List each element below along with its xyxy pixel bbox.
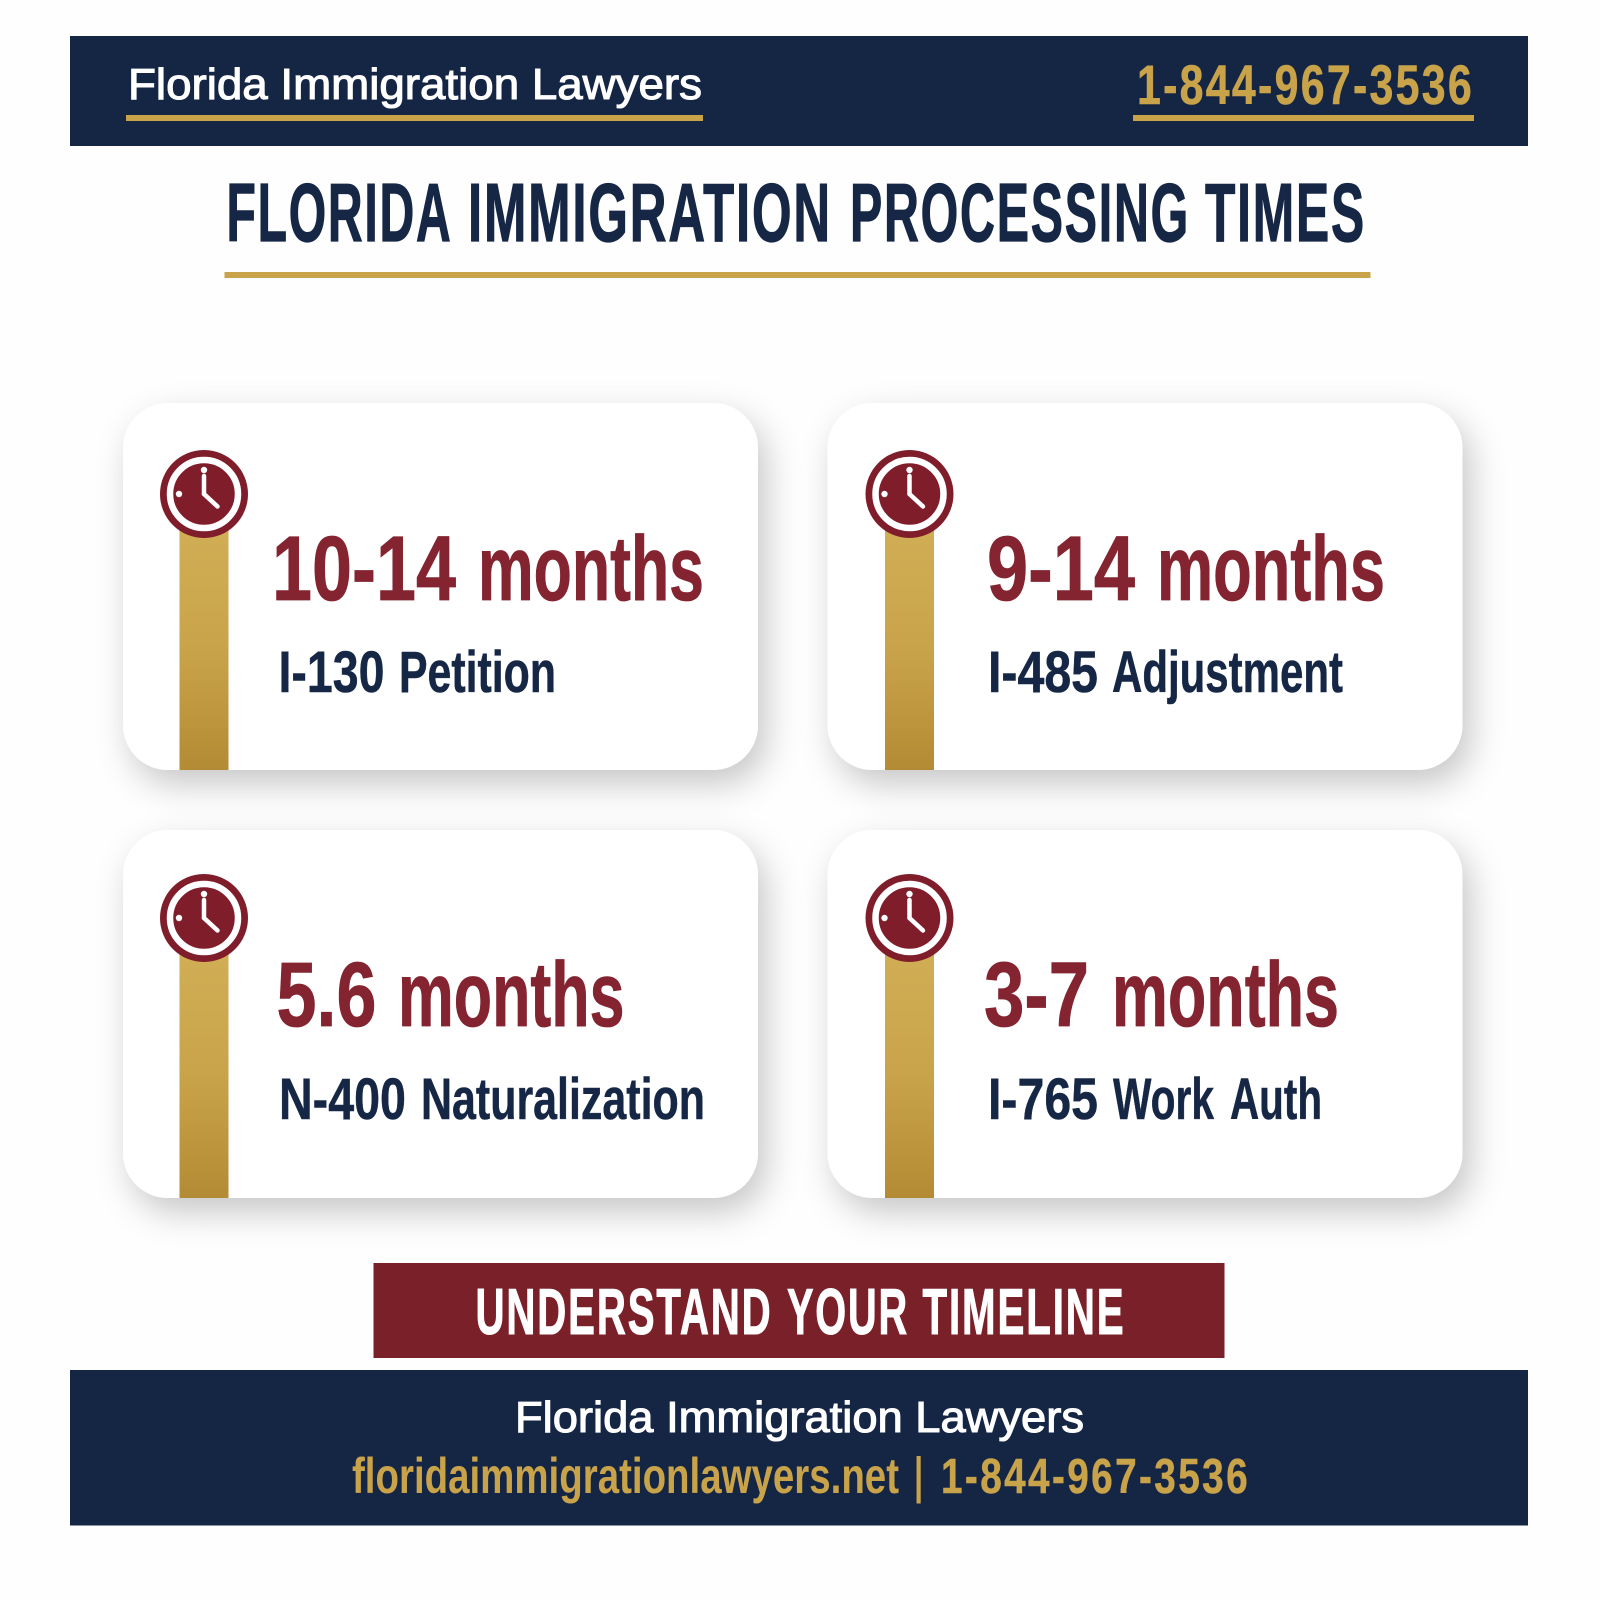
panel: N-400 Naturalization (123, 830, 758, 1198)
title: TIMES (1205, 166, 1366, 259)
form name (988, 640, 1343, 705)
panel: I-130 Petition (123, 403, 758, 770)
processing time: 9-14 (987, 518, 1135, 620)
title (224, 166, 1370, 278)
processing time: 5.6 (276, 944, 376, 1046)
form name: I-765 (988, 1067, 1098, 1132)
processing time (276, 944, 624, 1046)
icon: clock (160, 874, 248, 962)
icon: clock (866, 874, 954, 962)
icon: clock (160, 450, 248, 538)
processing time (987, 518, 1385, 620)
form name (988, 1067, 1322, 1132)
footer website and phone: floridaimmigrationlawyers.net (352, 1448, 899, 1504)
footer band (70, 1370, 1528, 1526)
call to action banner: UNDERSTAND (476, 1275, 772, 1348)
header band (70, 36, 1528, 146)
call to action banner: TIMELINE (922, 1275, 1126, 1348)
processing time: 10-14 (272, 518, 456, 620)
processing time: months (1157, 518, 1385, 620)
processing time (272, 518, 704, 620)
form name: N-400 (279, 1067, 406, 1132)
form name (278, 640, 556, 705)
form name: Petition (399, 640, 556, 705)
footer website and phone: | (912, 1447, 925, 1504)
form name (279, 1067, 705, 1132)
title: FLORIDA (226, 166, 452, 259)
form name: Work (1113, 1067, 1215, 1132)
panel: I-765 Work Auth (828, 830, 1462, 1198)
header firm name: Florida Immigration Lawyers (128, 60, 702, 109)
title: PROCESSING (850, 166, 1190, 259)
call to action banner: YOUR (787, 1275, 909, 1348)
call to action banner (374, 1263, 1224, 1358)
processing time: months (1112, 944, 1339, 1046)
form name: Naturalization (421, 1067, 705, 1132)
header phone number: 1-844-967-3536 (1137, 53, 1474, 116)
form name: Adjustment (1112, 640, 1343, 705)
panel: I-485 Adjustment (828, 403, 1462, 770)
processing time: 3-7 (984, 944, 1089, 1046)
processing time: months (478, 518, 704, 620)
footer firm name: Florida Immigration Lawyers (515, 1393, 1084, 1442)
processing time: months (398, 944, 624, 1046)
form name: I-485 (988, 640, 1098, 705)
icon: clock (866, 450, 954, 538)
processing time (984, 944, 1339, 1046)
footer website and phone: 1-844-967-3536 (941, 1450, 1250, 1504)
form name: I-130 (278, 640, 384, 705)
title: IMMIGRATION (468, 166, 832, 259)
form name: Auth (1230, 1067, 1322, 1132)
